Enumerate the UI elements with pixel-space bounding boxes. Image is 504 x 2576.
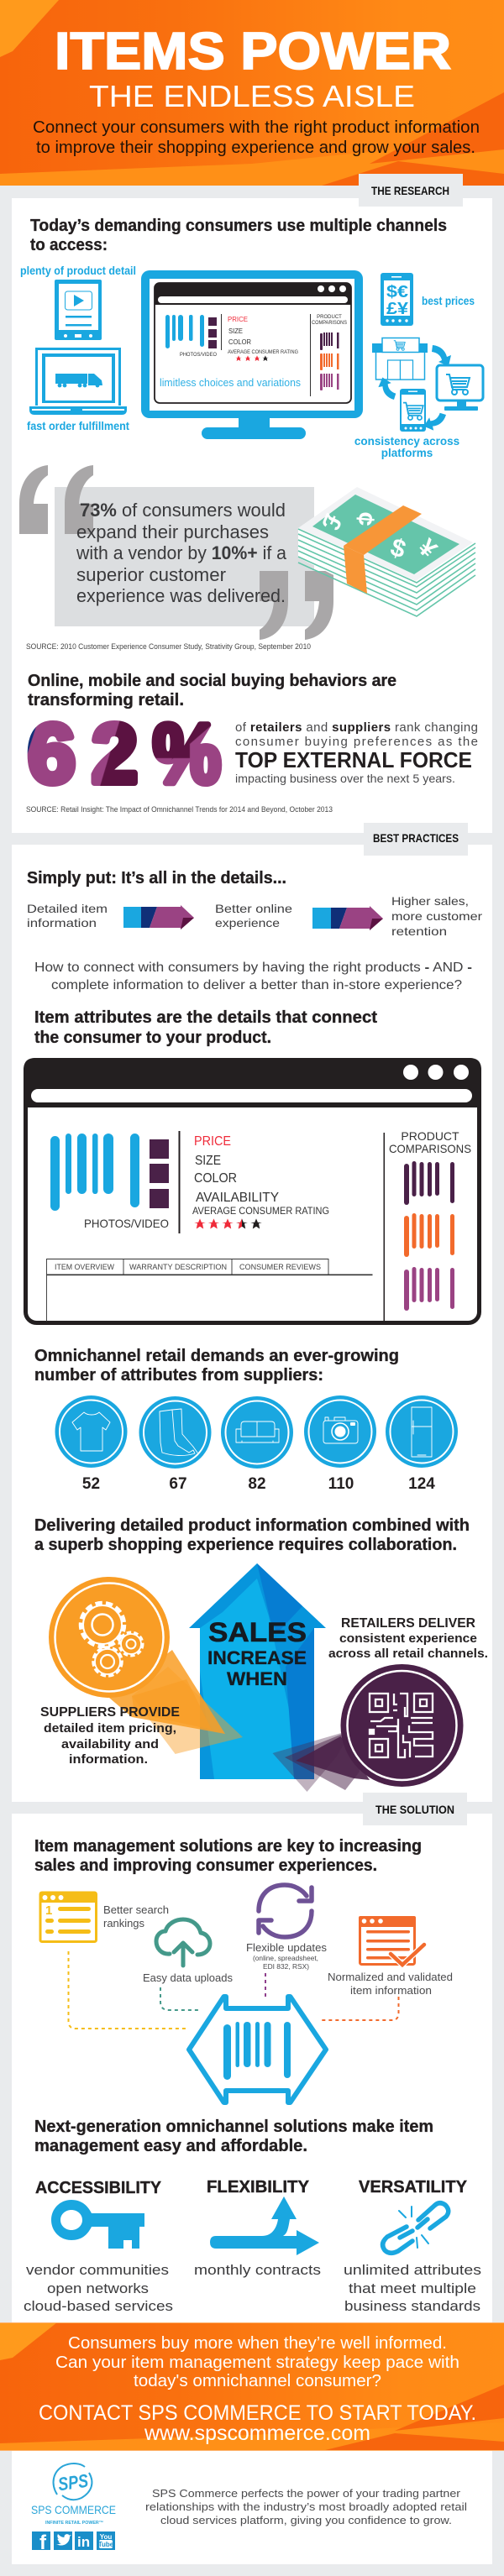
icon: search rankings document: 1 xyxy=(45,1903,52,1918)
icon: forking arrow xyxy=(210,2196,319,2255)
tab: the research: THE RESEARCH xyxy=(371,184,449,197)
big number: 62%: 6 xyxy=(28,707,76,801)
text: suppliers provide xyxy=(40,1705,180,1767)
sps commerce logo xyxy=(31,2463,116,2554)
dashed connectors xyxy=(69,1951,398,2029)
label: flexible updates: EDI 832, RSX) xyxy=(263,1962,309,1971)
quote box xyxy=(19,465,333,640)
arrows: cycle xyxy=(376,345,451,432)
icon: supplier gears xyxy=(49,1577,243,1754)
cta text: Consumers buy more when they’re well informed. xyxy=(68,2334,447,2353)
icon: sync arrows xyxy=(259,1885,312,1937)
arrow: sales increase: SALES xyxy=(208,1617,307,1647)
quote text: 73% of consumers would xyxy=(80,500,286,521)
heading: next generation: management easy and affordable. xyxy=(34,2137,307,2155)
question text: complete information to deliver a better than in-store experience? xyxy=(51,978,462,992)
quote marks: closing xyxy=(260,571,333,640)
icon: laptop with truck xyxy=(29,348,127,415)
heading: channels: to access: xyxy=(30,236,108,254)
icon: search rankings document xyxy=(39,1892,97,1941)
intro text: Connect your consumers with the right product information xyxy=(33,118,480,137)
collaboration diagram xyxy=(40,1563,488,1792)
qr code xyxy=(370,1694,433,1757)
heading: omnichannel xyxy=(34,1347,399,1385)
flow: detail to sales: Detailed item xyxy=(27,902,108,915)
icon: retailer qr code xyxy=(272,1664,464,1792)
arrow: sales increase xyxy=(189,1563,326,1779)
quote text: with a vendor by 10%+ if a xyxy=(76,542,287,563)
column: versatility: VERSATILITY xyxy=(359,2178,468,2196)
icon: sofa 82 xyxy=(221,1396,293,1493)
heading: next generation: Next-generation omnichannel solutions make item xyxy=(34,2118,433,2136)
text: retailers deliver: RETAILERS DELIVER xyxy=(341,1616,475,1631)
stat text: TOP EXTERNAL FORCE xyxy=(235,747,472,772)
quote text: superior customer xyxy=(76,564,226,585)
heading: item management xyxy=(34,1837,422,1875)
company description: relationships with the industry’s most broadly adopted retail xyxy=(145,2500,467,2513)
quote text: expand their purchases xyxy=(76,521,269,542)
icon: computer xyxy=(437,365,483,411)
column: flexibility: monthly contracts xyxy=(194,2262,321,2278)
diagram: item management xyxy=(39,1885,453,2102)
icon: barcode hexagon xyxy=(189,1997,326,2102)
icon: desktop monitor with product page: SIZE xyxy=(228,327,243,335)
label: consistency across platforms: consistency across xyxy=(354,435,459,448)
stat text xyxy=(235,720,478,785)
source note: SOURCE: Retail Insight: The Impact of Omnichannel Trends for 2014 and Beyond, October 2013 xyxy=(26,805,333,814)
column: accessibility: vendor communities xyxy=(26,2262,169,2278)
icon: desktop monitor with product page: COMPARISONS xyxy=(312,321,347,326)
icon: boots 67: 67 xyxy=(169,1475,187,1493)
icon: stack of money: ¥ xyxy=(412,534,442,563)
icon: phone with cart xyxy=(400,389,426,432)
logo mark: SPS xyxy=(57,2470,90,2495)
call to action banner xyxy=(0,2322,504,2451)
column: versatility: business standards xyxy=(344,2298,480,2314)
column: versatility xyxy=(344,2178,481,2314)
heading: collaboration: a superb shopping experience requires collaboration. xyxy=(34,1536,457,1554)
tabs xyxy=(47,1259,373,1322)
label: fast order fulfillment: fast order fulfillment xyxy=(27,420,129,432)
heading: collaboration xyxy=(34,1516,470,1554)
cta text xyxy=(55,2334,459,2390)
label: flexible updates: Flexible updates xyxy=(246,1941,328,1954)
icon: desktop monitor with product page: PRODUCT xyxy=(317,315,342,320)
icon: sofa 82: 82 xyxy=(248,1475,266,1493)
column: versatility: that meet multiple xyxy=(349,2280,476,2296)
tabs: CONSUMER REVIEWS xyxy=(239,1263,321,1272)
tab: the solution xyxy=(363,1793,467,1825)
flow: detail to sales: Better online xyxy=(215,902,292,915)
icon: desktop monitor with product page: AVERAGE CONSUMER RATING xyxy=(228,349,298,355)
icon: key xyxy=(51,2200,144,2249)
label: better search rankings xyxy=(103,1903,169,1929)
label: consistency across platforms: platforms xyxy=(381,447,433,459)
heading: item attributes: the consumer to your product. xyxy=(34,1029,271,1047)
icon: shirt 52: 52 xyxy=(82,1475,100,1493)
tab: the solution: THE SOLUTION xyxy=(375,1803,454,1816)
column: accessibility: open networks xyxy=(47,2280,149,2296)
cta text: today's omnichannel consumer? xyxy=(134,2372,381,2390)
arrow xyxy=(312,906,383,930)
big number: 62%: % xyxy=(153,707,221,801)
social icons: You xyxy=(100,2533,112,2541)
text: retailers deliver: across all retail channels. xyxy=(328,1647,488,1661)
cta text: Can your item management strategy keep pace with xyxy=(55,2353,459,2372)
tabs: WARRANTY DESCRIPTION xyxy=(129,1263,227,1272)
large browser mockup: PHOTOS/VIDEO xyxy=(84,1217,169,1230)
icon: phone with currencies: $€ xyxy=(386,283,408,301)
icon: store xyxy=(372,338,428,380)
label: plenty of product detail: plenty of product detail xyxy=(20,264,136,277)
social icons: f xyxy=(39,2531,47,2554)
flow: detail to sales: more customer xyxy=(391,909,482,923)
attributes xyxy=(192,1134,329,1217)
company description: cloud services platform, giving you confidence to grow. xyxy=(160,2514,452,2526)
label: better search rankings: Better search xyxy=(103,1903,169,1916)
heading: item attributes xyxy=(34,1008,377,1047)
icon: phone with currencies xyxy=(381,273,413,326)
social icons: Tube xyxy=(98,2541,114,2548)
icon: desktop monitor with product page: PHOTOS/VIDEO xyxy=(180,352,217,358)
icon: boots 67 xyxy=(139,1396,212,1493)
comparisons xyxy=(383,1133,385,1322)
icon: desktop monitor with product page xyxy=(141,270,363,439)
label: flexible updates xyxy=(246,1941,328,1971)
column: flexibility: FLEXIBILITY xyxy=(207,2178,310,2196)
label: flexible updates: (online, spreadsheet, xyxy=(253,1954,318,1962)
heading: collaboration: Delivering detailed product information combined with xyxy=(34,1516,470,1535)
heading: item attributes: Item attributes are the details that connect xyxy=(34,1008,377,1027)
stat text: of retailers and suppliers rank changing xyxy=(235,720,478,735)
icon: stack of money xyxy=(298,487,475,616)
column: accessibility xyxy=(24,2179,173,2314)
label: normalized item information xyxy=(328,1971,453,1997)
subtitle: THE ENDLESS AISLE xyxy=(89,79,415,113)
attributes: AVAILABILITY xyxy=(196,1191,279,1205)
heading: item management: Item management solutions are key to increasing xyxy=(34,1837,422,1856)
column: flexibility xyxy=(194,2178,321,2278)
heading: channels xyxy=(30,217,447,254)
icon: camera 110 xyxy=(304,1395,376,1493)
flow: detail to sales: Higher sales, xyxy=(391,894,469,908)
website: www.spscommerce.com xyxy=(144,2422,370,2445)
heading: transforming retail xyxy=(28,672,396,709)
icon group: consistency across platforms xyxy=(372,338,483,432)
label: normalized item information: item information xyxy=(350,1984,432,1997)
icon: shirt 52 xyxy=(55,1395,128,1493)
heading: item management: sales and improving consumer experiences. xyxy=(34,1856,377,1875)
sps commerce logo: SPS COMMERCE xyxy=(31,2503,116,2516)
arrow: sales increase: WHEN xyxy=(227,1668,287,1689)
heading: next generation xyxy=(34,2118,433,2155)
header banner xyxy=(0,0,504,186)
column: versatility: unlimited attributes xyxy=(344,2262,481,2278)
heading: transforming retail: Online, mobile and social buying behaviors are xyxy=(28,672,396,690)
text: suppliers provide: SUPPLIERS PROVIDE xyxy=(40,1705,180,1720)
large browser mockup: COMPARISONS xyxy=(389,1142,471,1155)
tabs: ITEM OVERVIEW xyxy=(55,1263,114,1272)
label: better search rankings: rankings xyxy=(103,1917,144,1929)
attribute circles xyxy=(55,1395,458,1493)
icon: validated document xyxy=(359,1916,424,1965)
attributes: PRICE xyxy=(194,1134,231,1149)
thumbnails xyxy=(150,1139,169,1208)
big number: 62%: 2 xyxy=(92,707,138,801)
icon: desktop monitor with product page: COLOR xyxy=(228,338,251,346)
big number: 62% xyxy=(28,707,221,801)
sps commerce logo: INFINITE RETAIL POWER™ xyxy=(45,2521,103,2526)
label: easy data uploads: Easy data uploads xyxy=(143,1971,233,1984)
text: suppliers provide: detailed item pricing, xyxy=(44,1721,176,1736)
stat text: consumer buying preferences as the xyxy=(235,735,478,749)
heading: omnichannel: number of attributes from suppliers: xyxy=(34,1366,323,1385)
text: retailers deliver xyxy=(328,1616,488,1661)
intro text xyxy=(33,118,480,157)
question text xyxy=(34,961,472,992)
title: ITEMS POWER xyxy=(55,23,451,81)
icon: camera 110: 110 xyxy=(328,1475,354,1493)
arrow xyxy=(123,905,194,929)
tab: best practices xyxy=(364,823,468,856)
contact line: CONTACT SPS COMMERCE TO START TODAY. xyxy=(39,2401,476,2425)
question text: How to connect with consumers by having the right products - AND - xyxy=(34,961,472,975)
attributes: COLOR xyxy=(194,1171,237,1186)
quote text: experience was delivered. xyxy=(76,585,286,606)
column: accessibility: ACCESSIBILITY xyxy=(35,2179,162,2197)
social icons xyxy=(32,2531,115,2554)
heading: transforming retail: transforming retail. xyxy=(28,691,184,709)
attributes: AVERAGE CONSUMER RATING xyxy=(192,1205,329,1217)
source note: SOURCE: 2010 Customer Experience Consumer Study, Strativity Group, September 2010 xyxy=(26,642,311,652)
panel: research xyxy=(12,198,492,833)
photo barcode xyxy=(50,1134,139,1211)
icon: tablet xyxy=(55,280,102,340)
attributes: SIZE xyxy=(195,1154,221,1168)
text: retailers deliver: consistent experience xyxy=(339,1631,477,1646)
icon: stack of money: ¢ xyxy=(350,510,380,527)
tab: the research xyxy=(359,174,463,207)
large browser mockup: PRODUCT xyxy=(401,1129,459,1143)
icon: desktop monitor with product page: limitless choices and variations xyxy=(160,377,301,389)
icon: broken chain xyxy=(383,2203,449,2253)
flow: detail to sales: information xyxy=(27,916,97,929)
star rating xyxy=(194,1218,262,1229)
flow: detail to sales: experience xyxy=(215,916,280,929)
panel: solution xyxy=(12,1814,492,2564)
text: suppliers provide: information. xyxy=(69,1752,148,1767)
heading: omnichannel: Omnichannel retail demands an ever-growing xyxy=(34,1347,399,1365)
label: consistency across platforms xyxy=(354,435,459,459)
label: best prices: best prices xyxy=(422,295,475,307)
column: accessibility: cloud-based services xyxy=(24,2298,173,2314)
flow: detail to sales: retention xyxy=(391,924,447,938)
quote text xyxy=(76,500,287,606)
arrow: sales increase: INCREASE xyxy=(207,1647,307,1668)
social icons: in xyxy=(77,2534,90,2550)
icon: cloud upload xyxy=(156,1919,210,1966)
heading: channels: Today’s demanding consumers use multiple channels xyxy=(30,217,447,235)
large browser mockup xyxy=(24,1058,481,1323)
tab: best practices: BEST PRACTICES xyxy=(373,831,459,845)
text: suppliers provide: availability and xyxy=(61,1737,159,1751)
heading: simply put: Simply put: It’s all in the details... xyxy=(27,869,286,887)
label: normalized item information: Normalized and validated xyxy=(328,1971,453,1983)
company description xyxy=(145,2487,467,2526)
panel: best practices xyxy=(12,845,492,1802)
quote marks: opening xyxy=(19,465,93,534)
icon: refrigerator 124: 124 xyxy=(408,1475,435,1493)
icon: refrigerator 124 xyxy=(386,1395,458,1493)
intro text: to improve their shopping experience and grow your sales. xyxy=(36,138,475,157)
icon: phone with currencies: £¥ xyxy=(386,300,409,318)
icon: desktop monitor with product page: PRICE xyxy=(228,316,248,323)
flow: detail to sales xyxy=(27,894,482,938)
icon: stack of money: $ xyxy=(387,533,409,564)
company description: SPS Commerce perfects the power of your trading partner xyxy=(152,2487,461,2500)
icon: stack of money: £ xyxy=(316,510,347,535)
stat text: impacting business over the next 5 years. xyxy=(235,772,455,785)
